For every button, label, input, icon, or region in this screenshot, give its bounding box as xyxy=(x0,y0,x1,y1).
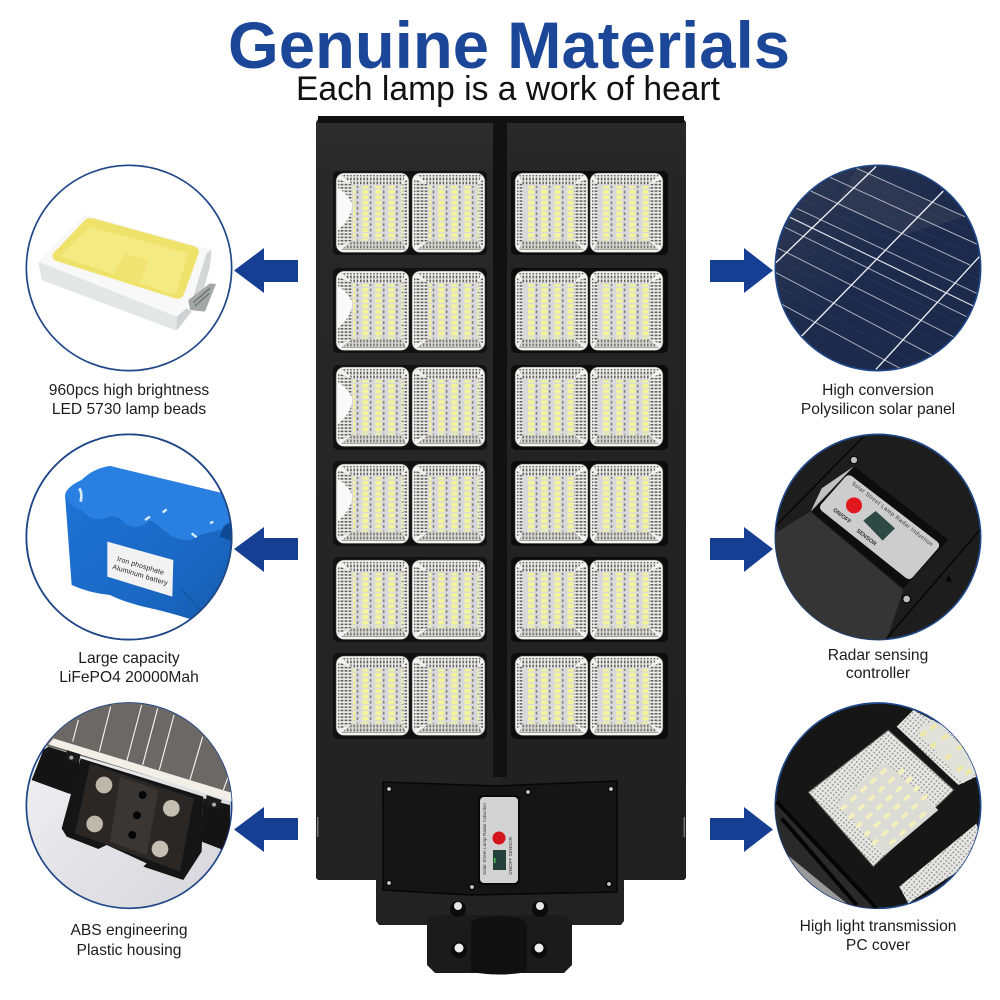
circle photo: controller label: Solar Street Lamp Radar Induction xyxy=(850,481,934,548)
callout: PC cover xyxy=(710,703,983,954)
caption: ABS engineering xyxy=(70,922,188,939)
caption: High light transmission xyxy=(800,918,956,935)
radar sensor control card: ON/OFF SENSOR xyxy=(508,836,513,875)
title: Genuine Materials xyxy=(228,8,790,82)
callout: radar controller xyxy=(710,434,981,682)
callout: LED lamp beads xyxy=(26,165,298,418)
rear cover plate xyxy=(383,781,617,895)
circle photo: battery pack: Iron phosphate xyxy=(116,556,165,577)
callout: solar panel xyxy=(710,165,981,418)
arrow: right pointing xyxy=(710,527,773,572)
caption: Plastic housing xyxy=(77,942,181,959)
caption: controller xyxy=(846,665,910,682)
radar sensor control card xyxy=(478,795,520,885)
circle photo: controller label: SENSOR xyxy=(855,528,877,548)
circle photo: controller label xyxy=(775,434,981,640)
circle photo: LED chip xyxy=(26,165,232,371)
arrow: right pointing xyxy=(710,807,773,852)
arrow: left pointing xyxy=(234,248,298,293)
caption: LED 5730 lamp beads xyxy=(52,401,206,418)
circle photo: battery pack xyxy=(26,434,237,640)
arrow: left pointing xyxy=(234,807,298,852)
circle photo: PC lens xyxy=(775,703,983,908)
caption: High conversion xyxy=(822,382,934,399)
circle photo: ABS bracket xyxy=(26,702,237,908)
caption: Radar sensing xyxy=(828,647,928,664)
arrow: left pointing xyxy=(234,527,298,572)
circle photo: polysilicon cells xyxy=(775,165,981,371)
callout: housing xyxy=(26,702,298,959)
LED module rows xyxy=(336,173,663,736)
radar sensor control card: Solar Street Lamp Radar Induction xyxy=(482,803,487,875)
arrow: right pointing xyxy=(710,248,773,293)
central solar street lamp product xyxy=(316,116,686,974)
callout: battery xyxy=(26,434,298,686)
subtitle: Each lamp is a work of heart xyxy=(296,70,721,108)
caption: LiFePO4 20000Mah xyxy=(59,669,199,686)
caption: 960pcs high brightness xyxy=(49,382,209,399)
lamp mounting bracket and pole clamp xyxy=(376,860,624,974)
caption: Large capacity xyxy=(78,650,180,667)
lamp body xyxy=(316,116,686,880)
caption: Polysilicon solar panel xyxy=(801,401,955,418)
circle photo: battery pack: Aluminum battery xyxy=(111,564,169,587)
circle photo: controller label: ON/OFF xyxy=(831,508,852,526)
caption: PC cover xyxy=(846,937,910,954)
